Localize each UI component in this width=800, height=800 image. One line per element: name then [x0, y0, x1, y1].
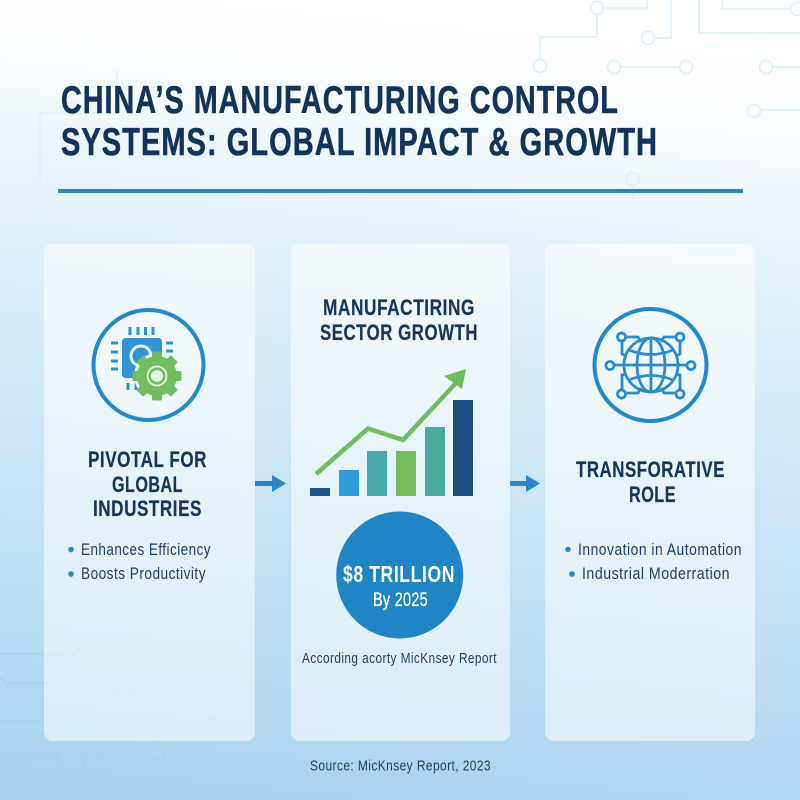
source note: Source: MicKnsey Report, 2023 [310, 758, 491, 774]
stat circle: $8 trillion [336, 512, 463, 638]
heading: transforative role: TRANSFORATIVE [576, 457, 725, 482]
icon: gear [132, 352, 182, 400]
bullet list: left: Boosts Productivity [81, 564, 206, 583]
bullet list: right [565, 540, 742, 583]
network connectors [606, 333, 695, 398]
bullet list: left: Enhances Efficiency [81, 540, 211, 559]
circuit pattern: top right [534, 0, 800, 200]
chip pins [111, 327, 173, 390]
growth arrowhead [444, 369, 466, 389]
globe [624, 338, 678, 392]
stat circle: $8 trillion: $8 TRILLION [343, 561, 455, 587]
title: CHINA’S MANUFACTURING CONTROL [61, 79, 619, 122]
gear hub [148, 366, 166, 386]
arrow: left to centre [255, 475, 286, 492]
circuit pattern: bottom left [0, 648, 219, 800]
title rule [58, 189, 743, 193]
heading: manufacturing sector growth [320, 295, 478, 345]
heading: manufacturing sector growth: SECTOR GROWTH [320, 320, 478, 345]
bullet list: left [68, 540, 211, 583]
chip body [122, 338, 162, 378]
growth line [316, 383, 456, 474]
circuit pattern: left [40, 70, 240, 285]
heading: pivotal for global industries [88, 447, 207, 521]
attribution text: According acorty MicKnsey Report [302, 651, 497, 667]
arrow: centre to right [510, 475, 540, 492]
bullet list: right: Innovation in Automation [578, 540, 742, 559]
heading: pivotal for global industries: PIVOTAL FOR [88, 447, 207, 472]
heading: transforative role: ROLE [629, 482, 676, 507]
title [61, 79, 658, 164]
bar chart with growth arrow [310, 369, 473, 496]
icon: globe network [594, 309, 706, 421]
heading: transforative role [576, 457, 725, 507]
stat circle: $8 trillion: By 2025 [373, 590, 428, 611]
heading: manufacturing sector growth: MANUFACTIRING [323, 295, 475, 320]
panel: right card [545, 244, 755, 741]
heading: pivotal for global industries: GLOBAL [112, 472, 183, 497]
gear halo [134, 353, 180, 399]
bullet list: right: Industrial Moderration [582, 564, 730, 583]
panel: left card [44, 244, 255, 741]
heading: pivotal for global industries: INDUSTRIES [93, 496, 202, 521]
chip inner ring [131, 346, 151, 366]
panel: centre card [291, 244, 510, 741]
icon: chip and gear [94, 310, 204, 420]
